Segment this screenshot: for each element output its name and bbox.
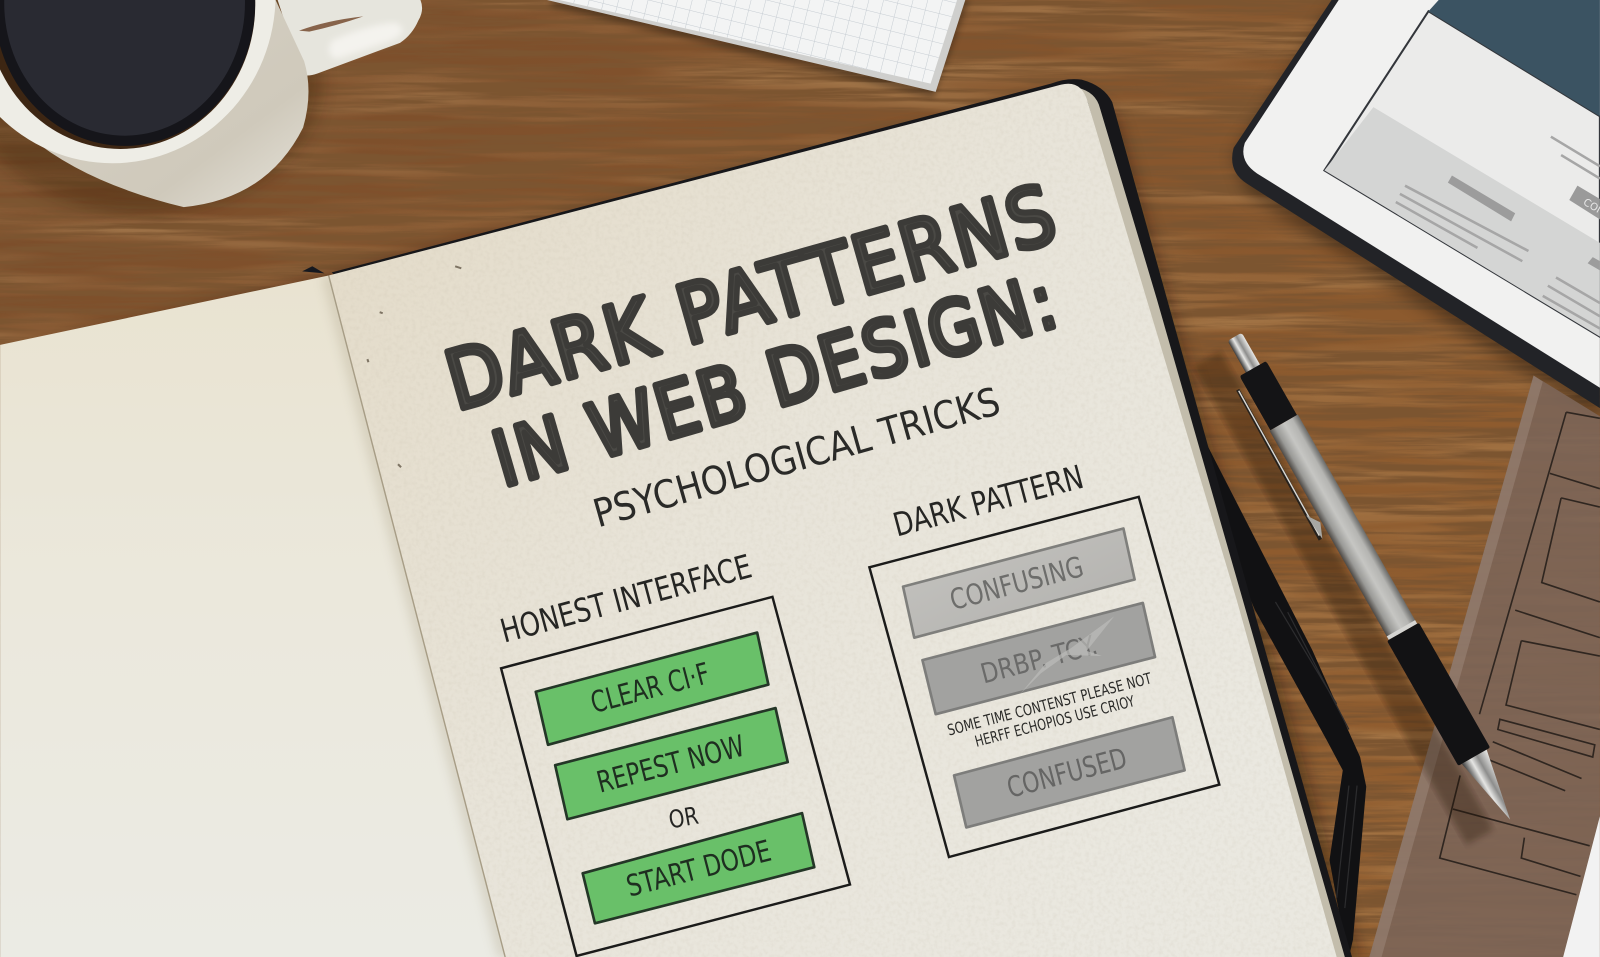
button: clear: CLEAR CI·F: [587, 656, 713, 720]
title: IN WEB DESIGN:: [484, 257, 1069, 504]
button: confusing: [903, 528, 1135, 638]
fine print: [945, 669, 1154, 751]
open notebook: [0, 79, 1366, 957]
mug rim: [0, 0, 276, 163]
fine print: HERFF ECHOPIOS USE CRIOY: [973, 692, 1137, 751]
panel: dark pattern: [869, 458, 1219, 857]
heading: dark pattern: DARK PATTERN: [889, 458, 1087, 544]
button: start dode: [583, 813, 814, 923]
button: clear: [536, 633, 768, 745]
subtitle: PSYCHOLOGICAL TRICKS: [588, 379, 1005, 537]
mug shadow: [0, 0, 321, 214]
wireframe box: [501, 597, 850, 956]
fine print: SOME TIME CONTENST PLEASE NOT: [945, 669, 1154, 739]
coffee mug: [0, 0, 422, 214]
tablet with wireframe screen: [1232, 0, 1600, 420]
panel: honest interface: [496, 547, 850, 956]
button: start dode: START DODE: [623, 834, 775, 904]
button: crossed out: [922, 603, 1155, 714]
coffee: [0, 0, 255, 149]
elastic band: [1194, 439, 1366, 957]
button: confused: [954, 717, 1185, 827]
wireframe box: [869, 497, 1219, 857]
black cover: [302, 79, 1352, 957]
pen: [1194, 328, 1526, 845]
page stack edge: [1078, 88, 1345, 957]
tracing paper with wireframe sketch: [1369, 375, 1600, 957]
title: DARK PATTERNS: [436, 167, 1068, 429]
pen barrel: [1219, 328, 1526, 829]
button: confused: CONFUSED: [1003, 741, 1130, 805]
button: repest now: REPEST NOW: [593, 729, 748, 800]
right page: [328, 84, 1337, 957]
left page: [0, 275, 505, 957]
label: or: OR: [666, 801, 701, 834]
mug body: [31, 0, 309, 207]
button: repest now: [555, 708, 788, 819]
notepad with grid paper: [547, 0, 969, 98]
button: crossed out: DRBP. TCY.: [977, 629, 1101, 690]
heading: honest interface: HONEST INTERFACE: [496, 547, 756, 650]
button: confusing: CONFUSING: [946, 549, 1087, 617]
mug handle: [278, 0, 422, 75]
pen clip: [1238, 390, 1322, 540]
tablet screen: [1324, 0, 1600, 337]
notebook shadow: [4, 90, 1361, 957]
title: [436, 167, 1069, 504]
